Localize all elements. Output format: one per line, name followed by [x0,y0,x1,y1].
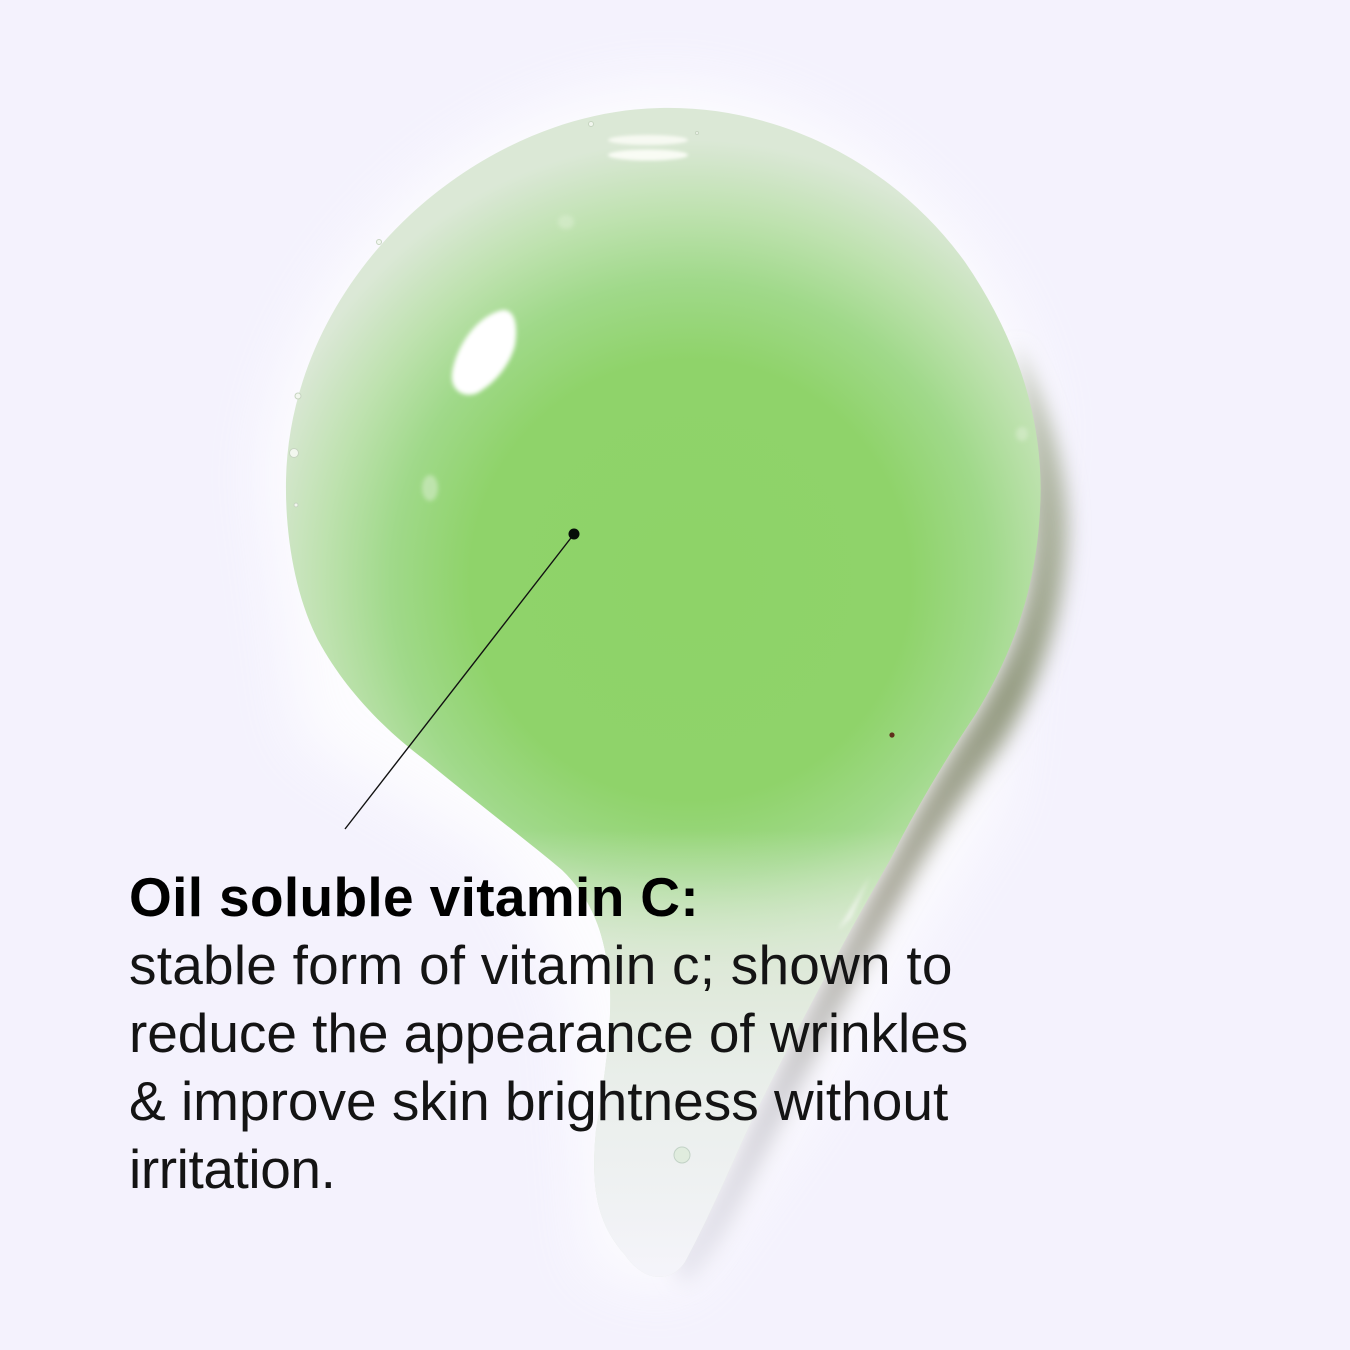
callout leader line [345,528,580,829]
white notch on right of tail [838,876,870,930]
callout text [129,866,968,1200]
small bubbles [290,122,698,1163]
highlight: large glare [452,310,516,395]
callout text: reduce the appearance of wrinkles [129,1002,968,1064]
highlight: top glare [608,135,688,160]
drop shadow [670,345,1068,1285]
callout text: Oil soluble vitamin C: [129,866,699,928]
callout text: irritation. [129,1138,336,1200]
white halo around the gel [265,85,1040,1290]
callout text: & improve skin brightness without [129,1070,948,1132]
callout text: stable form of vitamin c; shown to [129,934,953,996]
product swatch illustration [286,108,1081,1277]
gel body and tail [286,108,1041,1277]
faint gel marks [422,215,1028,501]
speck [889,732,895,738]
